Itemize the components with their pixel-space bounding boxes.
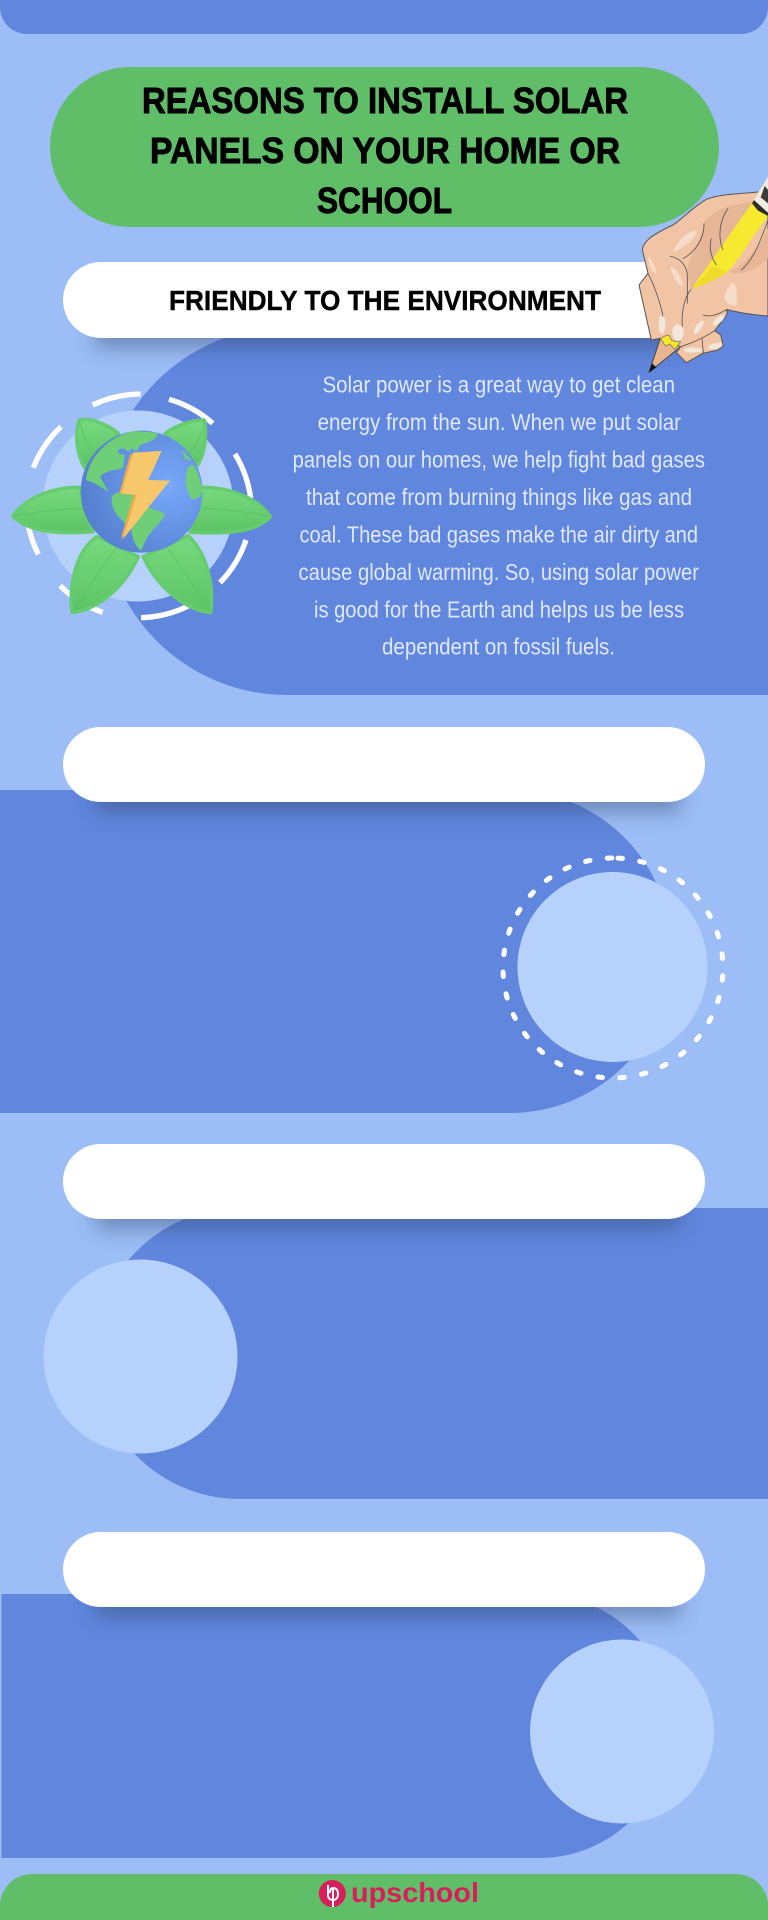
- body text: section 1: panels on our homes, we help fight bad gases: [293, 446, 705, 472]
- highlights: [648, 231, 737, 306]
- body text: section 1: energy from the sun. When we put solar: [318, 409, 681, 435]
- body text: section 1: dependent on fossil fuels.: [382, 634, 615, 660]
- pencil tip: [649, 338, 681, 372]
- fingernails: [659, 313, 726, 353]
- panel: section 2 background: [0, 790, 672, 1113]
- hand shading: [687, 202, 753, 289]
- shadow: section 4 pill: [95, 1587, 680, 1617]
- body text: section 1: that come from burning things like gas and: [306, 484, 692, 510]
- body text: section 1: Solar power is a great way to get clean: [322, 372, 675, 398]
- logo: upschool: upschool: [351, 1877, 479, 1908]
- pencil body: [691, 202, 768, 289]
- title: REASONS TO INSTALL SOLAR: [142, 80, 628, 121]
- circle placeholder: section 3: [44, 1260, 238, 1454]
- empty heading pill: section 2: [63, 727, 705, 802]
- creases: [648, 208, 768, 353]
- circle placeholder with dashed ring: section 2: [498, 853, 728, 1083]
- pencil paint edge: [660, 335, 681, 349]
- shadow: section 3 pill: [95, 1199, 680, 1229]
- top banner: [0, 0, 768, 34]
- empty heading pill: section 4: [63, 1532, 705, 1607]
- leaves, globe and bolt: [13, 419, 271, 613]
- shadow: section 2 pill: [95, 782, 680, 812]
- title: SCHOOL: [317, 180, 452, 221]
- panel: section 1 background: [103, 305, 768, 695]
- body text: section 1: is good for the Earth and helps us be less: [314, 596, 684, 622]
- icon: hand holding pencil: [639, 177, 768, 372]
- icon: earth with leaves and lightning bolt: [13, 394, 271, 618]
- footer banner: [0, 1874, 768, 1920]
- title: PANELS ON YOUR HOME OR: [150, 130, 620, 171]
- title: [50, 67, 719, 227]
- panel: section 4 background: [2, 1594, 671, 1858]
- shadow: section 1 pill: [95, 318, 680, 348]
- circle placeholder: section 4: [530, 1640, 714, 1824]
- heading: friendly to the environment: [63, 262, 705, 338]
- panel: section 3 background: [94, 1208, 768, 1499]
- body text: section 1: cause global warming. So, using solar power: [298, 559, 699, 585]
- backing circle: [42, 410, 234, 602]
- broken ring: [28, 394, 251, 618]
- body text: section 1: coal. These bad gases make the air dirty and: [300, 521, 698, 547]
- hand outline: [639, 191, 768, 363]
- body text: section 1: [293, 372, 705, 660]
- heading: friendly to the environment: FRIENDLY TO THE ENVIRONMENT: [169, 285, 601, 316]
- empty heading pill: section 3: [63, 1144, 705, 1219]
